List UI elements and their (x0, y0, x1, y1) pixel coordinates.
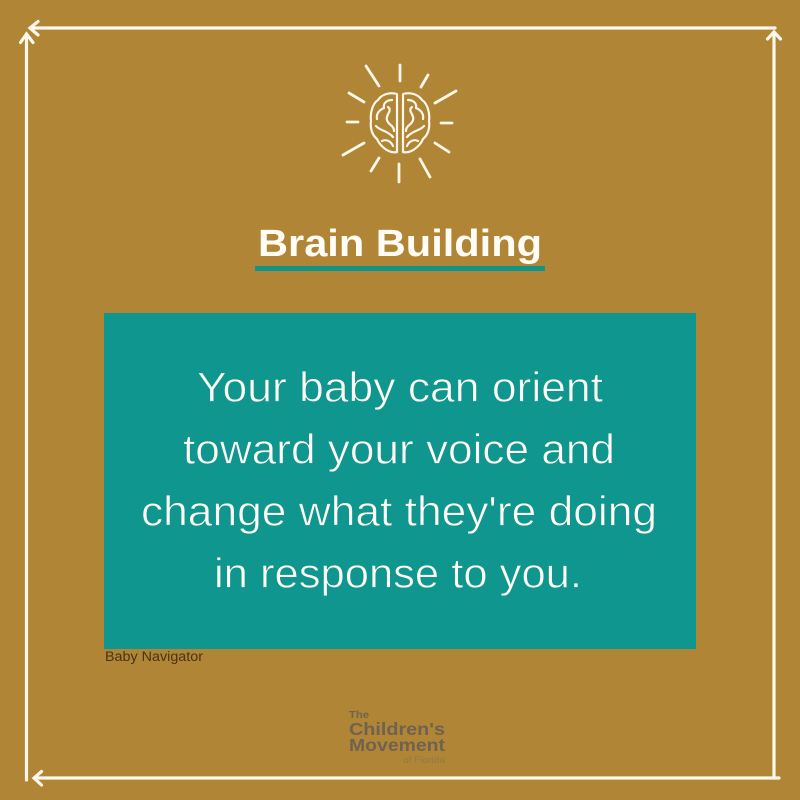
logo: The Children's Movement of Florida (349, 709, 446, 766)
message text: Your baby can orient (197, 364, 603, 410)
message text: in response to you. (214, 550, 582, 596)
title underline (255, 266, 545, 271)
logo: The Children's Movement of Florida: The (349, 709, 369, 721)
logo: The Children's Movement of Florida: Children's (349, 719, 445, 739)
title: Brain Building: Brain Building (258, 223, 542, 265)
message text: change what they're doing (141, 488, 657, 534)
message text: toward your voice and (183, 426, 615, 472)
logo: The Children's Movement of Florida: Movement (349, 735, 445, 755)
icon: brain with rays (343, 65, 456, 182)
panel: teal message (104, 313, 696, 649)
source credit: Baby Navigator (105, 649, 204, 664)
logo: The Children's Movement of Florida: of Florida (403, 755, 446, 766)
message text (141, 364, 657, 596)
